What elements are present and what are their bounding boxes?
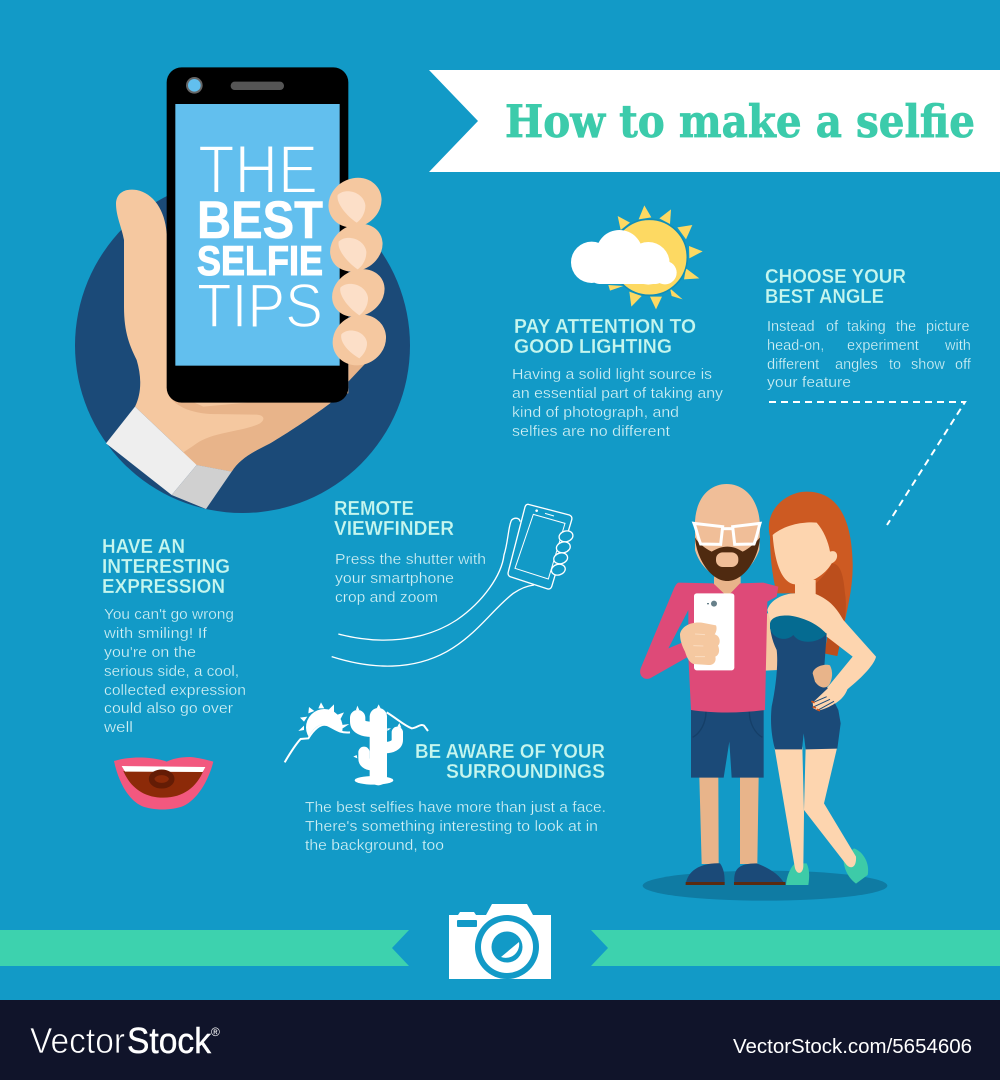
man: shirt <box>640 583 778 712</box>
sun <box>298 702 349 746</box>
body text: off <box>955 357 972 373</box>
heading: GOOD LIGHTING <box>514 336 672 358</box>
right ribbon <box>591 930 1000 966</box>
heading <box>102 536 230 598</box>
heading: PAY ATTENTION TO <box>514 316 696 338</box>
man: beard <box>695 537 760 581</box>
icon: hand with selfie phone outline <box>332 504 574 666</box>
phone screen title <box>197 131 323 341</box>
heading: VIEWFINDER <box>334 518 455 540</box>
sun rays <box>608 205 703 309</box>
footer bar <box>0 1000 1000 1080</box>
footer url: VectorStock.com/5654606 <box>733 1036 972 1058</box>
text block: expression <box>102 536 246 736</box>
body text: experiment <box>847 338 919 354</box>
text block: lighting <box>512 316 724 440</box>
phone camera <box>186 77 203 94</box>
phone speaker <box>231 82 284 90</box>
body text: Having a solid light source is <box>512 367 712 383</box>
body text: head-on, <box>767 338 824 354</box>
body text: kind of photograph, and <box>512 405 679 421</box>
man: hand <box>680 623 720 665</box>
illustration: hand holding phone <box>75 67 410 513</box>
heading: INTERESTING <box>102 556 230 578</box>
body text: you're on the <box>104 645 196 661</box>
man: phone <box>694 593 734 670</box>
body text: Press the shutter with <box>335 552 486 568</box>
heading: HAVE AN <box>102 536 185 558</box>
text block: angle <box>765 266 972 391</box>
body text <box>103 607 246 736</box>
body text <box>767 319 972 391</box>
phone outline <box>508 504 572 589</box>
shirt cuff <box>106 407 197 495</box>
phone screen title: TIPS <box>197 272 323 341</box>
phone screen title: SELFIE <box>197 237 323 284</box>
woman: hand on hip <box>813 683 847 711</box>
finger outlines <box>550 529 574 577</box>
icon: sun behind cloud <box>571 205 703 309</box>
woman: face <box>773 522 837 584</box>
fingers <box>319 168 395 375</box>
fingernails <box>337 191 368 358</box>
hand palm and thumb <box>116 190 348 472</box>
footer logo: Vector <box>30 1020 125 1061</box>
palm shading <box>167 382 348 472</box>
body text: Instead <box>767 319 815 335</box>
icon: smiling lips <box>114 757 213 809</box>
arrow: dashed pointer <box>769 402 965 525</box>
mountain line <box>285 712 428 762</box>
man: head <box>695 484 760 578</box>
body text: well <box>103 720 133 736</box>
footer logo <box>30 1020 220 1061</box>
phone body <box>167 67 348 403</box>
heading: REMOTE <box>334 498 414 520</box>
body text: your smartphone <box>335 571 454 587</box>
cactus <box>358 717 397 777</box>
footer logo: Stock <box>127 1020 212 1061</box>
woman: neck and shoulders <box>767 580 876 710</box>
ground shadow <box>643 871 887 901</box>
body text <box>335 552 486 606</box>
heading <box>334 498 455 540</box>
body text: selfies are no different <box>512 424 670 440</box>
hair back <box>769 492 853 656</box>
icon: desert cactus and sun <box>285 702 428 785</box>
left ribbon <box>0 930 409 966</box>
man: shoes <box>686 863 785 885</box>
body text: your feature <box>767 375 851 391</box>
body text <box>305 800 606 854</box>
man: arm behind woman <box>765 613 778 671</box>
icon: camera <box>449 904 551 979</box>
heading: BE AWARE OF YOUR <box>415 741 606 763</box>
woman: dress <box>770 623 841 749</box>
text block: surroundings <box>305 741 606 854</box>
woman: legs <box>774 747 804 873</box>
cloud <box>571 230 677 285</box>
body text: an essential part of taking any <box>512 386 724 402</box>
body text: with smiling! If <box>103 626 208 642</box>
mountain shadow <box>300 724 352 752</box>
body text: serious side, a cool, <box>104 664 239 680</box>
man: glasses <box>694 523 760 544</box>
body text <box>512 367 724 440</box>
heading: BEST ANGLE <box>765 286 884 308</box>
phone screen title: THE <box>198 131 318 208</box>
sun disc <box>611 219 687 295</box>
body text: with <box>944 338 971 354</box>
man: neck <box>714 577 741 597</box>
finger base <box>348 353 373 382</box>
woman: shoes <box>786 863 809 885</box>
body text: collected expression <box>104 683 246 699</box>
heading: CHOOSE YOUR <box>765 266 907 288</box>
footer logo: ® <box>211 1025 220 1039</box>
body text: different <box>767 357 819 373</box>
body text: There's something interesting to look at in <box>305 819 598 835</box>
heading: SURROUNDINGS <box>446 761 605 783</box>
illustration: couple taking a selfie <box>640 484 887 901</box>
title banner <box>429 70 1000 172</box>
text block: remote viewfinder <box>334 498 486 606</box>
body text: crop and zoom <box>335 590 438 606</box>
phone screen title: BEST <box>197 191 323 250</box>
heading: EXPRESSION <box>102 576 225 598</box>
phone screen <box>175 104 340 366</box>
body text: to <box>889 357 901 373</box>
man: hand on waist <box>813 665 832 687</box>
body text: could also go over <box>104 701 233 717</box>
arm outline <box>338 518 520 640</box>
body text: the background, too <box>305 838 444 854</box>
man: shorts <box>691 710 764 778</box>
body text: angles <box>835 357 878 373</box>
body text: taking <box>847 319 886 335</box>
heading <box>415 741 606 783</box>
body text: You can't go wrong <box>104 607 234 623</box>
body text: picture <box>926 319 970 335</box>
body text: The best selfies have more than just a face. <box>305 800 606 816</box>
heading <box>514 316 696 358</box>
heading <box>765 266 907 308</box>
body text: show <box>911 357 945 373</box>
body text: of <box>826 319 839 335</box>
man: legs <box>699 777 759 864</box>
dark blue circle <box>75 178 410 513</box>
body text: the <box>896 319 916 335</box>
